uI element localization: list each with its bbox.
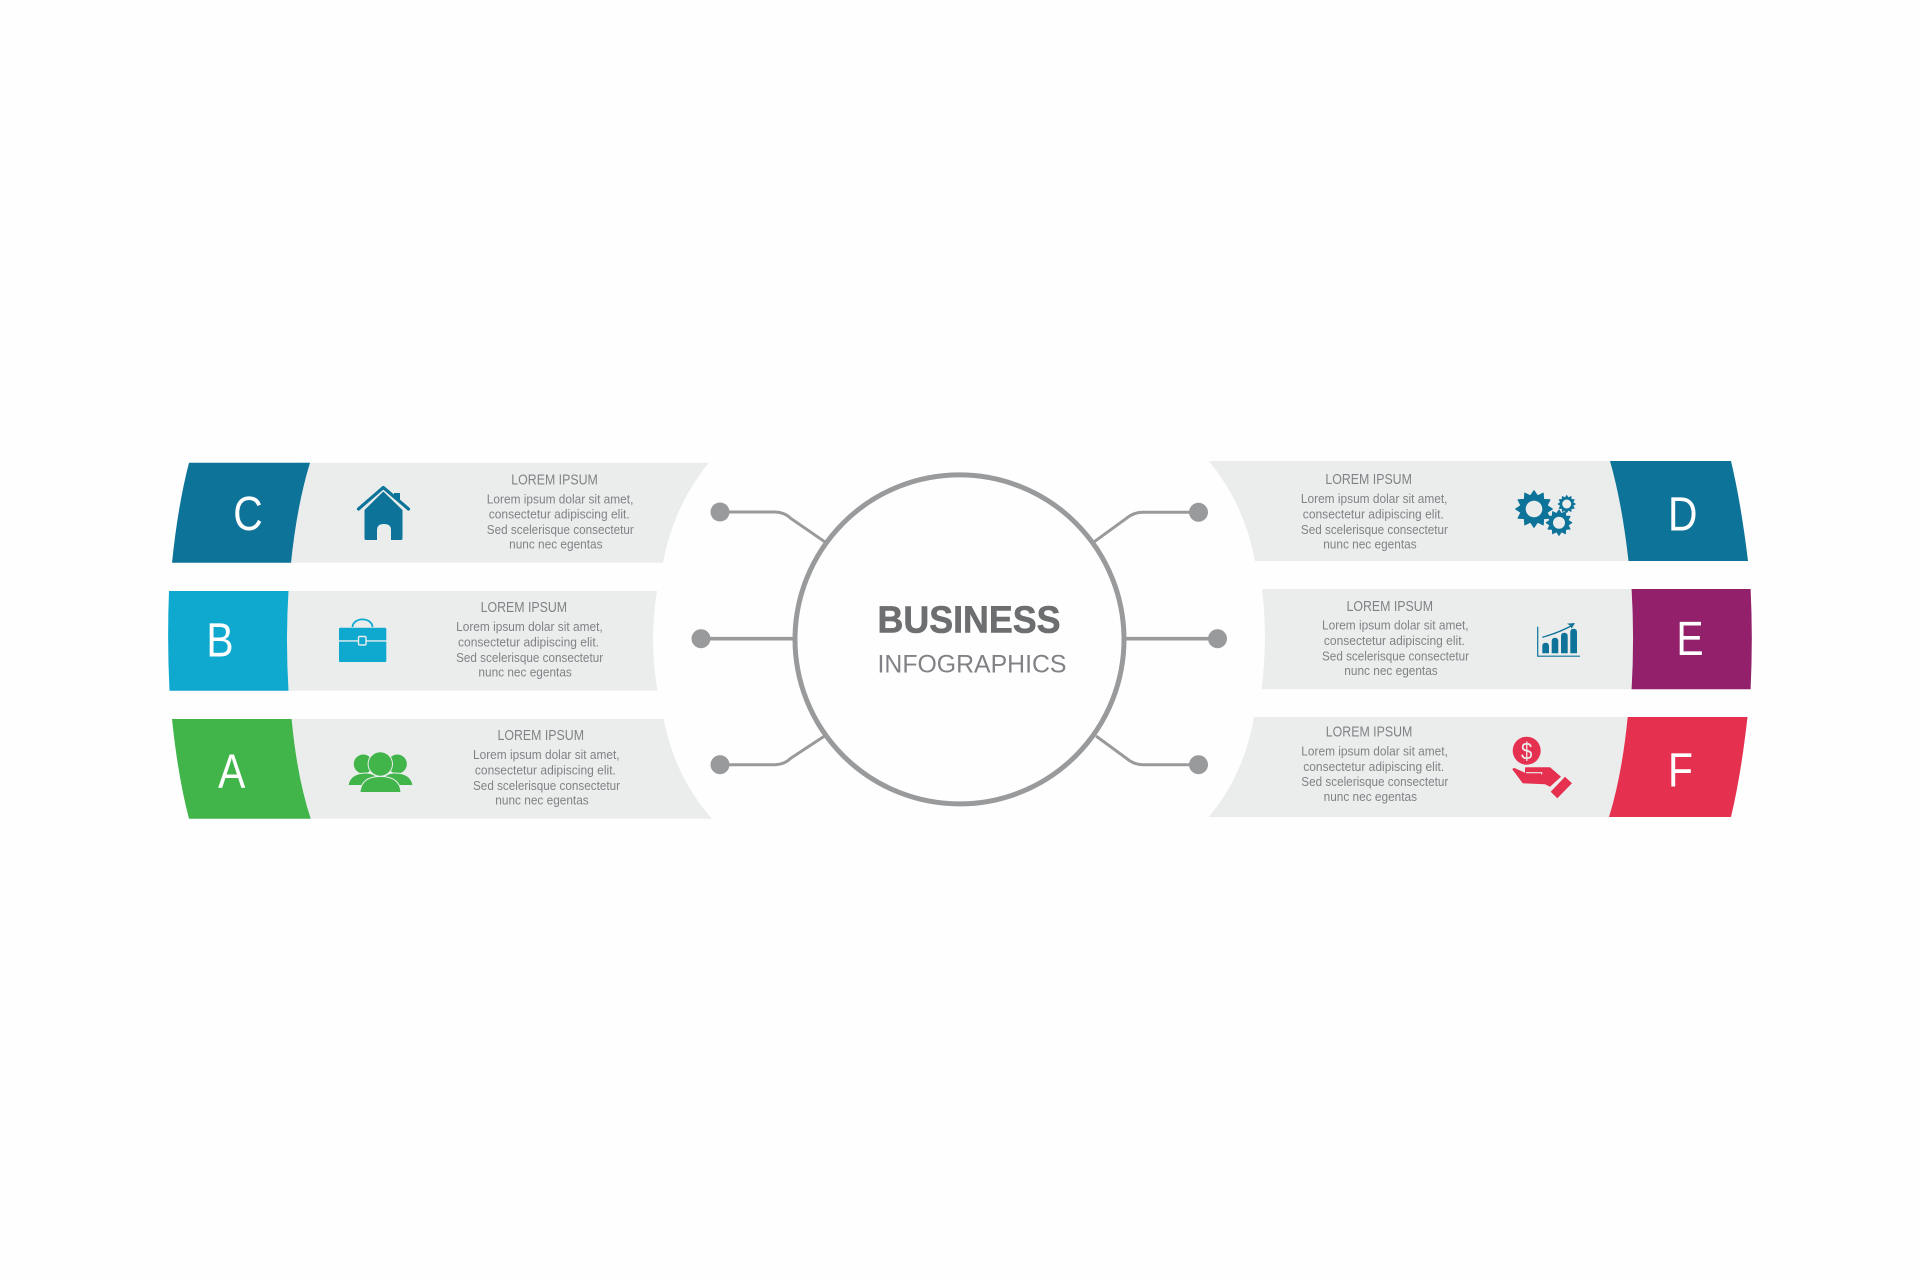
text block F: consectetur adipiscing elit. <box>1303 759 1444 774</box>
icon: people <box>348 752 413 792</box>
text block E: nunc nec egentas <box>1344 663 1438 678</box>
grey band B <box>280 591 658 691</box>
letter C: C <box>233 488 263 541</box>
text block B: LOREM IPSUM <box>481 600 567 616</box>
text block C <box>487 472 634 552</box>
grey band C <box>280 463 709 563</box>
grey band F <box>1209 717 1640 817</box>
connector to F <box>1096 736 1208 774</box>
text block E <box>1322 599 1470 678</box>
text block E: consectetur adipiscing elit. <box>1324 633 1465 648</box>
icon: hand with dollar coin: $ <box>1521 738 1533 765</box>
panel: C <box>172 463 709 563</box>
text block D: consectetur adipiscing elit. <box>1303 507 1444 522</box>
text block B: nunc nec egentas <box>478 665 572 680</box>
central circle <box>795 475 1124 804</box>
letter F: F <box>1668 745 1693 797</box>
text block A: nunc nec egentas <box>495 792 589 808</box>
panel: B <box>168 591 658 691</box>
connectors and dots <box>692 502 1227 774</box>
text block B: Sed scelerisque consectetur <box>456 650 604 665</box>
text block C: consectetur adipiscing elit. <box>489 507 630 522</box>
text block C: LOREM IPSUM <box>511 472 598 488</box>
text block D: Sed scelerisque consectetur <box>1301 522 1449 537</box>
text block A: consectetur adipiscing elit. <box>475 762 616 778</box>
text block E: Sed scelerisque consectetur <box>1322 648 1470 663</box>
colour tab F <box>1609 717 1748 817</box>
letter A: A <box>218 745 246 798</box>
text block F <box>1301 724 1449 804</box>
title <box>878 599 1066 679</box>
text block A: LOREM IPSUM <box>498 728 584 744</box>
grey band E <box>1262 589 1640 689</box>
colour tab B <box>168 591 288 691</box>
text block C: Sed scelerisque consectetur <box>487 522 634 537</box>
panel: A <box>172 719 712 819</box>
connector to D <box>1094 503 1208 542</box>
icon: gears <box>1516 490 1576 536</box>
colour tab E <box>1632 589 1752 689</box>
panel: D <box>1209 461 1748 561</box>
text block D: LOREM IPSUM <box>1325 472 1412 488</box>
text block F: nunc nec egentas <box>1324 789 1417 804</box>
text block D: Lorem ipsum dolar sit amet, <box>1301 491 1448 506</box>
connector to A <box>710 736 825 774</box>
text block B <box>456 600 604 680</box>
text block F: LOREM IPSUM <box>1326 724 1412 740</box>
colour tab A <box>172 719 311 819</box>
letter B: B <box>206 615 234 667</box>
text block B: consectetur adipiscing elit. <box>458 635 599 650</box>
text block E: LOREM IPSUM <box>1346 599 1433 615</box>
subheading: INFOGRAPHICS: INFOGRAPHICS <box>878 651 1066 679</box>
grey band D <box>1209 461 1630 561</box>
panel: E <box>1262 589 1752 689</box>
icon: briefcase <box>339 619 386 662</box>
text block F: Sed scelerisque consectetur <box>1301 774 1449 789</box>
colour tab C <box>172 463 310 563</box>
text block D: nunc nec egentas <box>1323 537 1417 552</box>
icon: growth chart <box>1538 623 1580 656</box>
text block A: Lorem ipsum dolar sit amet, <box>473 747 620 762</box>
text block A: Sed scelerisque consectetur <box>473 778 621 793</box>
letter E: E <box>1676 613 1704 666</box>
text block F: Lorem ipsum dolar sit amet, <box>1301 743 1448 758</box>
connector to B <box>692 629 795 648</box>
heading: BUSINESS: BUSINESS <box>878 599 1060 641</box>
text block C: nunc nec egentas <box>509 537 603 552</box>
text block B: Lorem ipsum dolar sit amet, <box>456 619 603 634</box>
grey band A <box>280 719 712 819</box>
connector to C <box>710 502 825 542</box>
connector to E <box>1124 629 1227 648</box>
icon: house <box>358 488 408 540</box>
letter D: D <box>1668 488 1697 541</box>
icon: hand with dollar coin <box>1512 737 1572 798</box>
text block D <box>1301 472 1449 552</box>
text block E: Lorem ipsum dolar sit amet, <box>1322 618 1469 633</box>
colour tab D <box>1610 461 1748 561</box>
text block C: Lorem ipsum dolar sit amet, <box>487 491 633 506</box>
text block A <box>473 728 621 808</box>
panel: F <box>1209 717 1748 817</box>
